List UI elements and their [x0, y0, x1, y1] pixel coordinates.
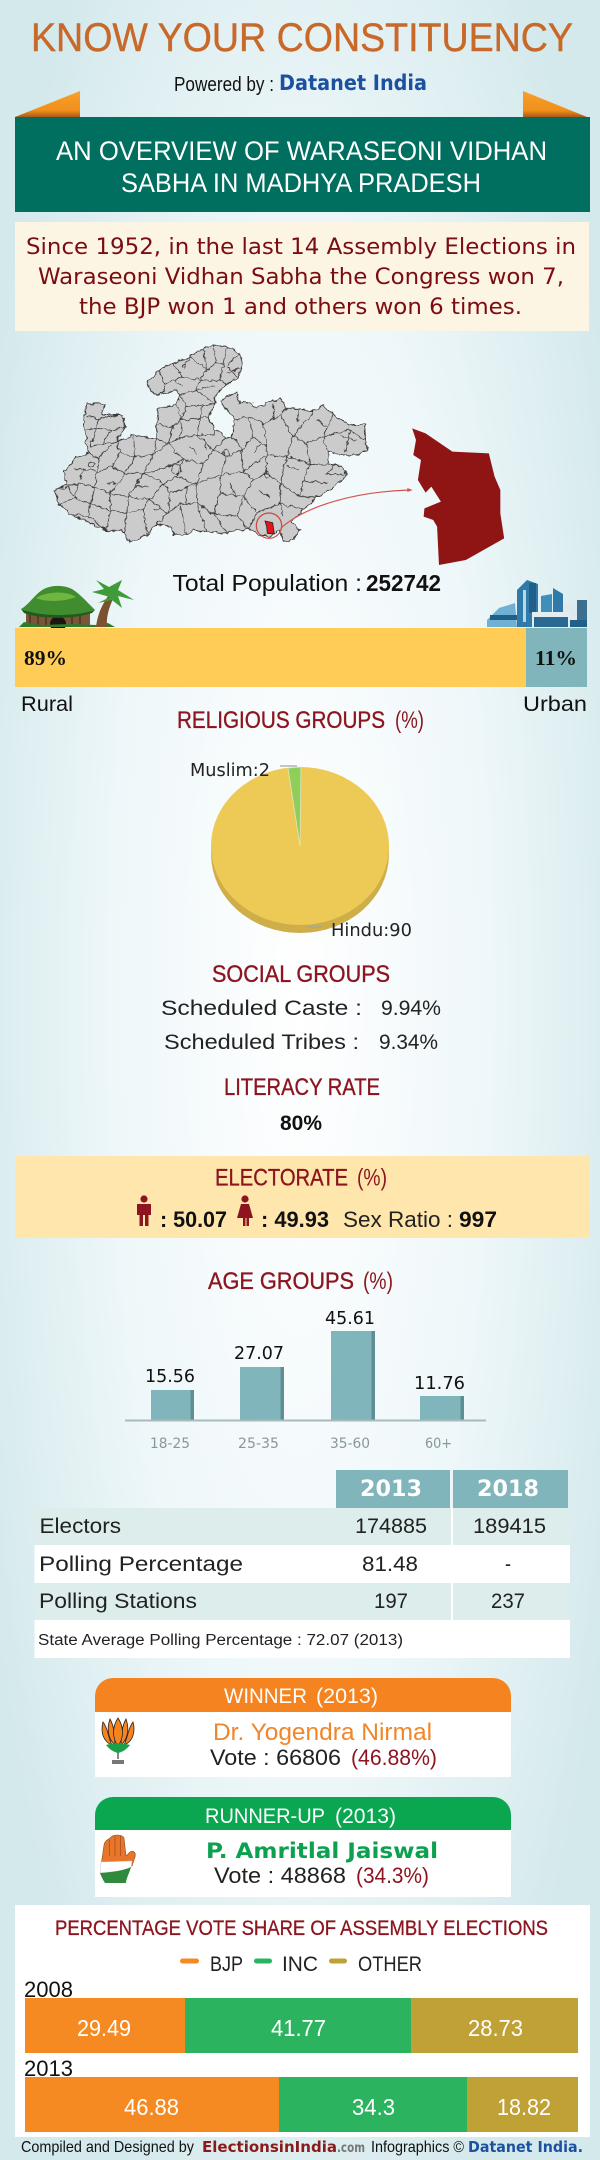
- stacked bar 2013: 2013: [24, 2056, 73, 2081]
- bar chart: age groups: [125, 1309, 486, 1452]
- callout circle: [256, 513, 282, 538]
- stacked bar 2008: 28.73: [468, 2015, 523, 2041]
- icon: urban buildings: [487, 580, 587, 627]
- stacked bar 2008: 2008: [24, 1977, 73, 2002]
- electors table: Polling Percentage: [39, 1553, 243, 1576]
- panel: runner-up: (2013): [335, 1805, 396, 1828]
- icon: man: [137, 1195, 151, 1226]
- electors table: -: [505, 1553, 511, 1576]
- bar chart: age groups: 35-60: [330, 1436, 370, 1452]
- stacked bar 2008: [24, 1977, 578, 2053]
- powered by line: Datanet India: [279, 71, 427, 95]
- bar chart: age groups: 25-35: [238, 1436, 279, 1452]
- age groups heading: AGE GROUPS: [208, 1268, 354, 1295]
- panel: winner: WINNER: [224, 1685, 307, 1708]
- summary text block: Waraseoni Vidhan Sabha the Congress won 7,: [38, 265, 564, 290]
- electors table: 189415: [473, 1515, 546, 1538]
- panel: percentage vote share: PERCENTAGE VOTE SHARE OF ASSEMBLY ELECTIONS: [55, 1917, 548, 1940]
- panel: winner: (2013): [316, 1685, 378, 1708]
- footer credits: ElectionsinIndia: [202, 2138, 337, 2156]
- social groups values: Scheduled Tribes :: [164, 1031, 359, 1054]
- stacked bar 2008: 29.49: [77, 2015, 131, 2041]
- panel: electorate: [15, 1156, 590, 1238]
- arrow head: [407, 488, 413, 492]
- rural urban bar: 11%: [535, 646, 577, 670]
- icon: hand: [100, 1835, 135, 1883]
- panel: electorate: : 50.07: [160, 1207, 227, 1232]
- district map: [55, 345, 368, 543]
- electors table: 2018: [477, 1477, 539, 1502]
- stacked bar 2008: 41.77: [271, 2015, 326, 2041]
- panel: electorate: ELECTORATE: [215, 1164, 348, 1192]
- footer credits: .com: [337, 2141, 365, 2156]
- electors table: [34, 1470, 570, 1658]
- religious groups heading: RELIGIOUS GROUPS: [177, 707, 385, 734]
- bar chart: age groups: 60+: [425, 1436, 452, 1452]
- bar chart: age groups: 45.61: [325, 1309, 375, 1329]
- electors table: State Average Polling Percentage : 72.07 (2013): [38, 1632, 403, 1649]
- stacked bar 2013: [24, 2056, 578, 2132]
- icon: rural hut: [19, 580, 134, 632]
- electors table: 2013: [360, 1477, 422, 1502]
- rural urban bar: [15, 628, 587, 687]
- social groups values: 9.94%: [381, 997, 441, 1020]
- panel: runner-up: P. Amritlal Jaiswal: [206, 1839, 438, 1863]
- panel: electorate: (%): [357, 1164, 387, 1192]
- icon: woman: [237, 1195, 253, 1226]
- panel: winner: (46.88%): [351, 1745, 437, 1770]
- rural urban bar: 89%: [24, 646, 67, 670]
- panel: runner-up: (34.3%): [356, 1863, 429, 1888]
- electors table: 174885: [355, 1515, 427, 1538]
- panel: electorate: 997: [459, 1207, 497, 1232]
- total population: Total Population :: [172, 570, 362, 596]
- pie chart: Hindu:90: [331, 921, 412, 941]
- stacked bar 2013: 18.82: [497, 2094, 551, 2120]
- electors table: Polling Stations: [39, 1590, 197, 1613]
- panel: winner: [95, 1678, 511, 1777]
- rural label: Rural: [21, 693, 73, 716]
- pie chart: [190, 761, 412, 941]
- constituency shape: [412, 428, 504, 565]
- social groups values: Scheduled Caste :: [161, 997, 362, 1020]
- powered by line: Powered by :: [174, 74, 274, 96]
- highlighted constituency on map: [265, 521, 274, 534]
- panel: runner-up: RUNNER-UP: [205, 1805, 325, 1828]
- panel: winner: Dr. Yogendra Nirmal: [213, 1719, 432, 1746]
- ribbon folds: [15, 91, 587, 117]
- electors table: 81.48: [362, 1553, 418, 1576]
- age groups heading: (%): [363, 1268, 393, 1295]
- social groups heading: SOCIAL GROUPS: [212, 961, 390, 988]
- panel: winner: Vote : 66806: [210, 1745, 341, 1770]
- arrow to constituency shape: [281, 490, 410, 528]
- electors table: Electors: [40, 1515, 121, 1538]
- panel: electorate: Sex Ratio :: [343, 1207, 453, 1232]
- powered by line: [174, 71, 427, 96]
- banner heading: AN OVERVIEW OF WARASEONI VIDHAN: [56, 136, 547, 166]
- title: KNOW YOUR CONSTITUENCY: [31, 16, 573, 60]
- footer credits: Infographics ©: [371, 2139, 464, 2156]
- banner heading: SABHA IN MADHYA PRADESH: [121, 168, 481, 198]
- bar chart: age groups: 15.56: [145, 1367, 195, 1387]
- social groups values: 9.34%: [379, 1031, 438, 1054]
- electors table: 237: [491, 1590, 525, 1613]
- legend: [180, 1953, 422, 1976]
- footer credits: Compiled and Designed by: [21, 2139, 194, 2156]
- legend: BJP: [210, 1953, 243, 1976]
- icon: lotus: [102, 1718, 134, 1764]
- summary text block: [15, 222, 589, 331]
- literacy rate value: 80%: [280, 1112, 322, 1135]
- stacked bar 2013: 34.3: [352, 2094, 395, 2120]
- map of Madhya Pradesh: [55, 345, 413, 543]
- panel: runner-up: Vote : 48868: [214, 1863, 346, 1888]
- social groups values: [161, 997, 441, 1054]
- pie chart: Muslim:2: [190, 761, 270, 781]
- religious groups heading: (%): [395, 707, 424, 734]
- stacked bar 2013: 46.88: [124, 2094, 179, 2120]
- bar chart: age groups: 18-25: [150, 1436, 190, 1452]
- footer credits: Datanet India.: [468, 2138, 583, 2156]
- summary text block: the BJP won 1 and others won 6 times.: [79, 295, 522, 320]
- banner heading: [15, 117, 590, 212]
- footer credits: [21, 2138, 583, 2156]
- total population: [172, 570, 441, 596]
- electors table: 197: [374, 1590, 408, 1613]
- literacy rate heading: LITERACY RATE: [224, 1074, 380, 1101]
- bar chart: age groups: 27.07: [234, 1344, 284, 1364]
- panel: runner-up: [95, 1797, 511, 1897]
- panel: percentage vote share: [15, 1905, 590, 2137]
- summary text block: Since 1952, in the last 14 Assembly Elections in: [26, 235, 576, 260]
- panel: electorate: : 49.93: [261, 1207, 329, 1232]
- legend: INC: [282, 1953, 318, 1976]
- legend: OTHER: [358, 1953, 422, 1976]
- total population: 252742: [366, 570, 441, 596]
- bar chart: age groups: 11.76: [414, 1374, 465, 1394]
- urban label: Urban: [523, 693, 587, 716]
